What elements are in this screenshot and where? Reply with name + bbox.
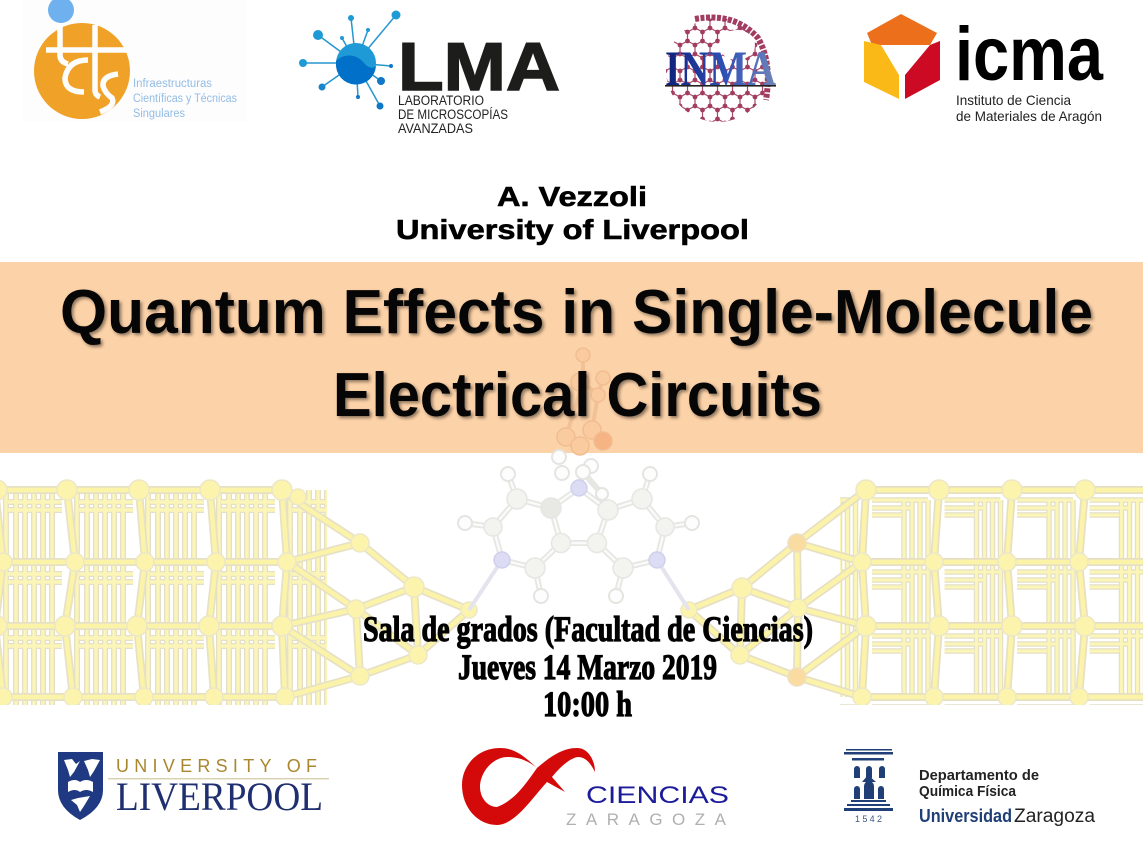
logo: TCS [22, 0, 246, 122]
logo: Universidad de Zaragoza: Química Física [919, 783, 1017, 800]
logo: TCS: Singulares [133, 108, 185, 120]
speaker [396, 181, 749, 245]
logo: INMA nanotube: INMA [665, 40, 776, 96]
logo: LMA: AVANZADAS [398, 121, 473, 136]
logo: University of Liverpool: LIVERPOOL [116, 774, 323, 819]
title: Electrical Circuits [333, 361, 822, 430]
speaker: University of Liverpool [396, 214, 749, 245]
logo: TCS: Infraestructuras [133, 78, 212, 90]
illustration: left gold lattice [0, 480, 477, 712]
logo: Ciencias Zaragoza [462, 748, 729, 829]
logo: Ciencias Zaragoza: CIENCIAS [586, 782, 729, 809]
logo: LMA [299, 10, 560, 136]
title band [0, 262, 1143, 453]
logo: University of Liverpool: UNIVERSITY OF [116, 756, 317, 776]
title: Quantum Effects in Single-Molecule [60, 278, 1093, 347]
event details [363, 609, 813, 724]
logo: Universidad de Zaragoza: Universidad [919, 806, 1012, 826]
logo: LMA: DE MICROSCOPÍAS [398, 107, 508, 122]
logo: ICMA: icma [955, 12, 1104, 97]
logo: Universidad de Zaragoza [844, 749, 1095, 827]
logo: Ciencias Zaragoza: ZARAGOZA [566, 810, 727, 829]
logo: LMA: LMA [398, 29, 560, 105]
logo: ICMA: Instituto de Ciencia [956, 92, 1071, 108]
logo: INMA nanotube [665, 15, 776, 125]
logo: LMA: LABORATORIO [398, 93, 484, 108]
title [60, 278, 1093, 430]
logo: ICMA [864, 12, 1104, 124]
event details: Jueves 14 Marzo 2019 [458, 647, 717, 687]
logo: Universidad de Zaragoza: 1542 [855, 814, 882, 824]
speaker: A. Vezzoli [497, 181, 647, 212]
logo: Universidad de Zaragoza: Departamento de [919, 767, 1039, 784]
event details: Sala de grados (Facultad de Ciencias) [363, 609, 813, 649]
illustration: right gold lattice [681, 480, 1143, 712]
logo: University of Liverpool [58, 752, 329, 820]
logo: Universidad de Zaragoza: Zaragoza [1014, 806, 1095, 827]
event details: 10:00 h [543, 684, 632, 724]
illustration: central molecule [458, 348, 699, 610]
logo: TCS: Científicas y Técnicas [133, 93, 237, 105]
logo: ICMA: de Materiales de Aragón [956, 108, 1102, 124]
